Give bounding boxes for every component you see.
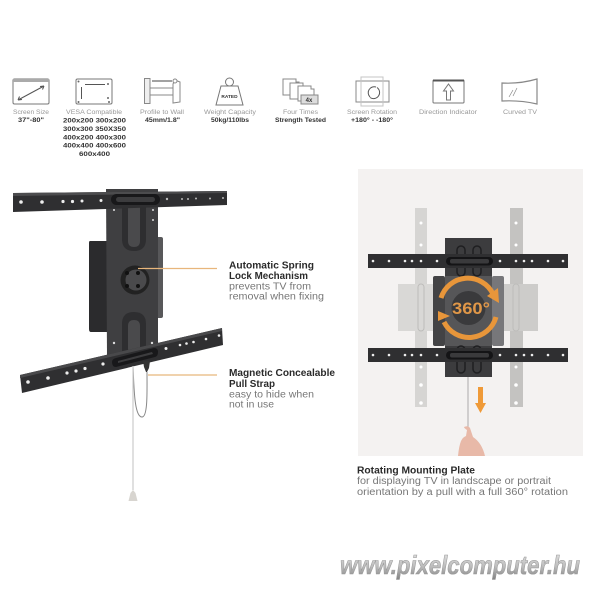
label: VESA: 300x300 350X350	[63, 126, 127, 133]
label: VESA: 400x200 400x300	[63, 134, 127, 142]
icon: weight	[216, 78, 243, 105]
label: screen size: 37"-80"	[18, 117, 44, 124]
icon: VESA	[76, 79, 112, 104]
label: screen size	[13, 109, 50, 124]
caption: rotating mounting plate	[357, 466, 568, 498]
rotation arrows with 360: 360°	[452, 300, 490, 318]
label: screen rotation: +180° - -180°	[351, 116, 394, 124]
label: VESA: 200x200 300x200	[63, 118, 127, 124]
icon: curved TV	[502, 79, 537, 104]
label: screen rotation: Screen Rotation	[347, 109, 398, 116]
callout line: spring lock	[138, 268, 217, 270]
label: weight	[204, 109, 257, 124]
callout text: spring lock: prevents TV from	[229, 282, 311, 292]
caption: rotating mounting plate: for displaying TV in landscape or portrait	[357, 476, 551, 487]
callout text: spring lock: Lock Mechanism	[229, 271, 308, 282]
callout line: pull strap	[148, 374, 217, 376]
icon: screen rotation	[356, 77, 389, 106]
icon: direction	[433, 80, 464, 103]
label: VESA	[63, 109, 127, 158]
orange down arrow	[475, 387, 486, 413]
horizontal bars	[368, 254, 568, 268]
top bar	[13, 191, 227, 212]
mount plate	[445, 238, 492, 377]
label: VESA: 600x400	[79, 151, 111, 158]
label: direction: Direction Indicator	[419, 109, 477, 116]
callout text: spring lock	[229, 260, 324, 302]
icon row	[13, 77, 538, 158]
label: profile to wall: Profile to Wall	[140, 109, 184, 116]
label: weight: Weight Capacity	[204, 109, 257, 116]
label: profile to wall	[140, 109, 184, 124]
callout text: pull strap	[229, 368, 336, 410]
icon: profile to wall	[144, 78, 180, 104]
pull strap	[133, 366, 147, 417]
magnetic tab	[143, 361, 150, 372]
lower bar	[20, 328, 223, 393]
ghost vertical bars	[415, 208, 427, 407]
icon: screen size	[13, 79, 49, 104]
callout text: pull strap: easy to hide when	[229, 390, 314, 400]
vertical plate	[106, 189, 158, 355]
label: curved TV: Curved TV	[503, 109, 538, 116]
icon: strength	[283, 79, 318, 104]
label: screen size: Screen Size	[13, 109, 50, 116]
callout text: pull strap: Pull Strap	[229, 379, 275, 390]
ghost plates	[398, 284, 433, 331]
pull cord	[467, 377, 469, 428]
caption: rotating mounting plate: Rotating Mounting Plate	[357, 466, 476, 476]
callout text: pull strap: not in use	[229, 400, 274, 410]
label: profile to wall: 45mm/1.8"	[145, 117, 180, 124]
back plate	[89, 241, 110, 332]
rotating disc	[120, 266, 150, 294]
panel: rotating mounting plate	[358, 169, 583, 456]
label: weight: 50kg/110lbs	[211, 117, 250, 124]
callout text: pull strap: Magnetic Concealable	[229, 368, 336, 379]
caption: rotating mounting plate: orientation by a pull with a full 360° rotation	[357, 487, 568, 498]
icon: strength: 4x	[306, 98, 313, 104]
label: VESA: VESA Compatible	[66, 109, 123, 116]
icon: weight: RATED	[221, 94, 238, 100]
label: strength	[275, 109, 326, 124]
rotation arrows with 360	[438, 278, 499, 337]
pull handle	[128, 490, 138, 501]
label: screen rotation	[347, 109, 398, 124]
callout text: spring lock: Automatic Spring	[229, 260, 314, 272]
label: strength: Four Times	[283, 109, 318, 116]
product photo: mount	[13, 189, 227, 501]
label: VESA: 400x400 400x600	[63, 142, 127, 150]
callout text: spring lock: removal when fixing	[229, 292, 324, 302]
label: strength: Strength Tested	[275, 117, 326, 124]
hand	[458, 426, 485, 456]
